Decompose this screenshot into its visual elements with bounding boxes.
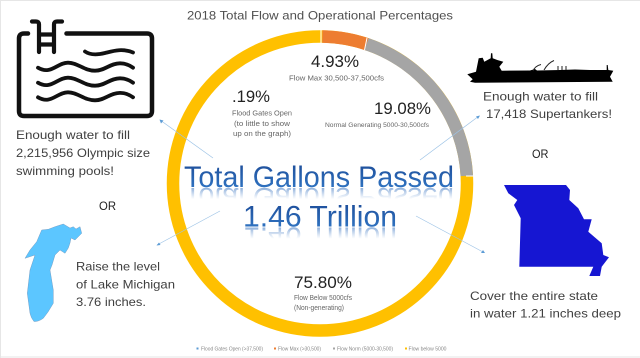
icon: Lake Michigan (25, 224, 82, 322)
label: flow below: Flow Below 5000cfs (294, 295, 352, 302)
text: Lake Michigan: Raise the level (76, 260, 160, 274)
legend: Flow Max (>30,500) (278, 346, 321, 352)
label: flow below: 75.80% (294, 273, 352, 292)
text: Missouri: Cover the entire state (470, 289, 598, 303)
label: flow below: (Non-generating) (294, 305, 344, 312)
heading: total gallons (184, 161, 454, 254)
text: supertankers: Enough water to fill (483, 90, 598, 104)
heading: total gallons: Total Gallons Passed (184, 161, 454, 194)
label: flood gates: (to little to show (234, 121, 291, 128)
icon: Missouri (504, 185, 609, 276)
legend (196, 346, 446, 352)
label: normal generating: Normal Generating 5000-30,500cfs (325, 122, 430, 129)
heading: total gallons: 1.46 Trillion (243, 200, 397, 234)
text: Lake Michigan (76, 260, 175, 309)
label: flow below (294, 273, 352, 312)
icon: swimming pool (19, 22, 152, 116)
label: flood gates: Flood Gates Open (232, 110, 292, 118)
text: Lake Michigan: of Lake Michigan (76, 278, 175, 292)
text: supertankers (483, 90, 612, 121)
label: normal generating: 19.08% (374, 99, 431, 118)
text: OR left: OR (99, 199, 116, 213)
heading: total gallons: 1.46 Trillion (243, 220, 397, 254)
text: Missouri: in water 1.21 inches deep (470, 307, 621, 321)
label: flood gates (232, 87, 292, 138)
text: Missouri (470, 289, 621, 321)
heading: total gallons: Total Gallons Passed (184, 181, 454, 214)
title: 2018 Total Flow and Operational Percentages (187, 8, 453, 22)
text: OR right: OR (532, 147, 549, 161)
text: swimming pools: swimming pools! (16, 164, 114, 178)
legend: Flood Gates Open (>37,500) (201, 346, 263, 352)
arrow: to pool (160, 120, 213, 158)
text: supertankers: 17,418 Supertankers! (486, 107, 612, 121)
icon: supertanker (467, 53, 613, 83)
text: swimming pools (16, 128, 150, 178)
label: flood gates: .19% (232, 87, 270, 106)
label: flow max (289, 52, 385, 82)
text: swimming pools: Enough water to fill (16, 128, 130, 142)
label: flow max: 4.93% (311, 52, 359, 71)
label: normal generating (325, 99, 431, 129)
legend: Flow below 5000 (408, 346, 446, 352)
text: swimming pools: 2,215,956 Olympic size (16, 146, 150, 160)
label: flood gates: up on the graph) (233, 131, 291, 138)
donut chart (173, 30, 474, 330)
text: Lake Michigan: 3.76 inches. (76, 295, 146, 309)
label: flow max: Flow Max 30,500-37,500cfs (289, 76, 385, 82)
arrow: to supertanker (420, 116, 480, 160)
legend: Flow Norm (5000-30,500) (337, 346, 393, 352)
arrow: to Lake Michigan (156, 211, 220, 246)
arrow: to Missouri (416, 216, 485, 253)
